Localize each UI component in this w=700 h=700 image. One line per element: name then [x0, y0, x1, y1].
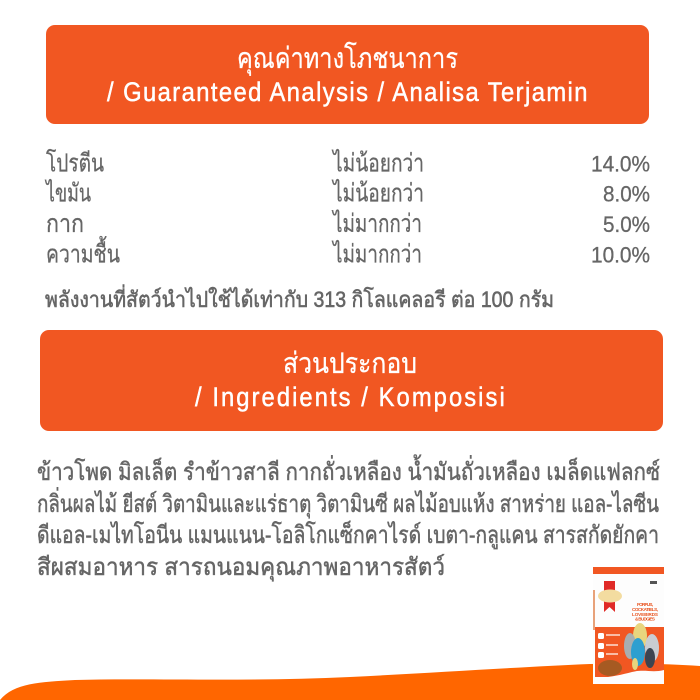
row: protein: ไม่น้อยกว่า — [331, 148, 424, 178]
row: moisture: 10.0% — [591, 242, 650, 268]
package title: FORPUS, — [637, 602, 653, 607]
weight label — [650, 581, 657, 584]
row: moisture: ไม่มากกว่า — [331, 240, 422, 268]
row: fibre: 5.0% — [603, 212, 650, 237]
row: fibre: ไม่มากกว่า — [331, 209, 422, 238]
panel: ingredients header — [40, 330, 663, 431]
text: ingredients list — [37, 454, 660, 582]
package side fold — [593, 590, 595, 630]
text: ingredients list: สีผสมอาหาร สารถนอมคุณภาพอาหารสัตว์ — [37, 553, 445, 582]
icon: bird food package — [593, 567, 664, 684]
food pellets — [598, 660, 622, 676]
package body — [593, 567, 664, 684]
package bottom curve — [593, 670, 664, 684]
row: moisture — [46, 236, 650, 268]
row: protein: 14.0% — [591, 152, 650, 176]
text: energy statement: พลังงานที่สัตว์นำไปใช้ได้เท่ากับ 313 กิโลแคลอรี ต่อ 100 กรัม — [45, 284, 554, 312]
package title — [632, 602, 658, 622]
heading: English and Indonesian ingredients title: / Ingredients / Komposisi — [195, 383, 505, 412]
row: protein — [46, 148, 650, 178]
heading: Thai nutrition title: คุณค่าทางโภชนาการ — [237, 41, 458, 76]
panel: guaranteed analysis header — [46, 25, 649, 124]
package orange panel — [595, 627, 664, 677]
brand badge — [598, 581, 622, 612]
package title: & BUDGIES — [635, 616, 655, 622]
heading: English and Indonesian title: / Guaranteed Analysis / Analisa Terjamin — [107, 78, 587, 107]
row: fibre: กาก — [46, 210, 84, 238]
row: fat: ไขมัน — [45, 178, 91, 208]
row: fibre — [46, 209, 650, 238]
table: nutrition values — [45, 148, 650, 268]
row: fat: ไม่น้อยกว่า — [331, 178, 424, 208]
package title: LOVEBIRDS — [632, 612, 658, 617]
row: fat: 8.0% — [603, 182, 650, 206]
row: protein: โปรตีน — [46, 148, 104, 178]
row: moisture: ความชื้น — [46, 236, 120, 268]
row: fat — [45, 178, 650, 208]
heading: Thai ingredients title: ส่วนประกอบ — [283, 348, 417, 380]
birds — [624, 623, 659, 670]
footer orange wave — [0, 664, 700, 700]
feature icons — [598, 633, 620, 658]
package top band — [593, 567, 664, 574]
package title: COCKATIELS, — [632, 607, 658, 612]
